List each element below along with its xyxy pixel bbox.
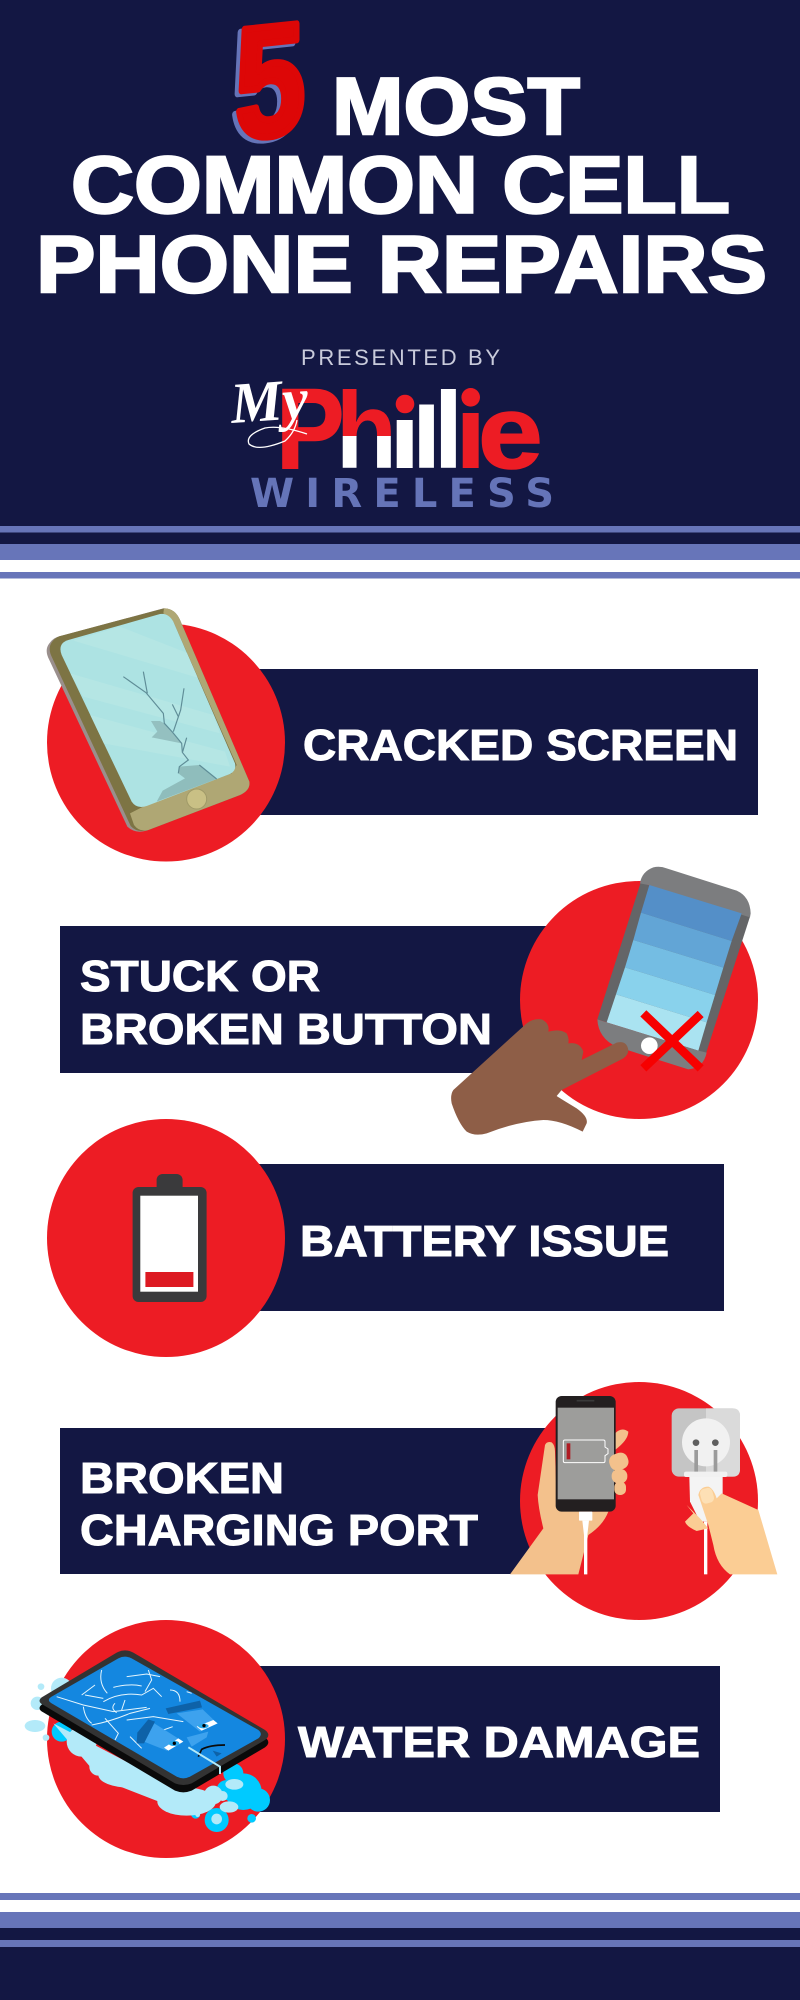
bar	[240, 1666, 720, 1812]
row 5: water damage	[25, 1620, 720, 1858]
label	[80, 952, 492, 1054]
logo: My Phillie Wireless: i	[389, 363, 421, 493]
cable	[579, 1512, 592, 1521]
logo: My Phillie Wireless: My	[227, 366, 310, 436]
label: BATTERY ISSUE	[300, 1217, 669, 1266]
screen cracks	[57, 1670, 192, 1748]
circle	[47, 1620, 285, 1858]
circle	[520, 881, 758, 1119]
row 2: stuck or broken button	[60, 867, 758, 1135]
bar	[240, 1164, 724, 1311]
logo: My Phillie Wireless: P	[276, 365, 344, 492]
logo: My Phillie Wireless: e	[478, 375, 543, 491]
right hand	[685, 1505, 708, 1531]
label: CHARGING PORT	[80, 1506, 478, 1555]
circle	[47, 624, 285, 862]
title: MOST	[332, 62, 580, 152]
label: STUCK OR	[80, 952, 320, 1001]
icon: phone, plug and hands	[510, 1396, 777, 1574]
logo: My Phillie Wireless: l	[412, 389, 442, 487]
row 3: battery issue	[47, 1119, 724, 1357]
logo: My Phillie Wireless: i	[455, 363, 487, 493]
top stripes	[0, 526, 800, 578]
broken pieces	[177, 1709, 217, 1732]
bar	[240, 669, 758, 815]
phone	[556, 1396, 616, 1512]
socket	[672, 1408, 740, 1477]
label: BROKEN BUTTON	[80, 1005, 492, 1054]
icon: wet broken phone	[25, 1650, 270, 1832]
plug	[684, 1472, 727, 1477]
circle	[520, 1382, 758, 1620]
icon: cracked phone	[47, 608, 249, 832]
label: WATER DAMAGE	[298, 1718, 700, 1767]
label: CRACKED SCREEN	[303, 721, 738, 770]
left hand	[510, 1442, 608, 1574]
footer background	[0, 1920, 800, 2000]
phone body	[40, 1658, 268, 1792]
logo: My Phillie Wireless: l	[433, 370, 464, 491]
icon: phone with finger and red cross	[451, 867, 751, 1135]
circle	[47, 1119, 285, 1357]
title	[36, 0, 767, 310]
bar	[60, 926, 560, 1073]
logo: My Phillie Wireless	[231, 381, 552, 508]
icon: low battery	[133, 1174, 207, 1302]
bar	[60, 1428, 560, 1574]
header background	[0, 0, 800, 560]
presented by: PRESENTED BY	[301, 345, 500, 370]
label: BROKEN	[80, 1454, 284, 1503]
bottom stripes	[0, 1893, 800, 1947]
logo: My Phillie Wireless: h	[336, 370, 397, 492]
label	[80, 1454, 478, 1555]
row 4: broken charging port	[60, 1382, 777, 1620]
logo: My Phillie Wireless: WIRELESS	[250, 471, 554, 517]
title: PHONE REPAIRS	[36, 220, 767, 310]
title: COMMON CELL	[71, 140, 730, 230]
logo: My Phillie Wireless: h	[336, 370, 397, 492]
water	[52, 1722, 270, 1832]
row 1: cracked screen	[47, 608, 758, 862]
